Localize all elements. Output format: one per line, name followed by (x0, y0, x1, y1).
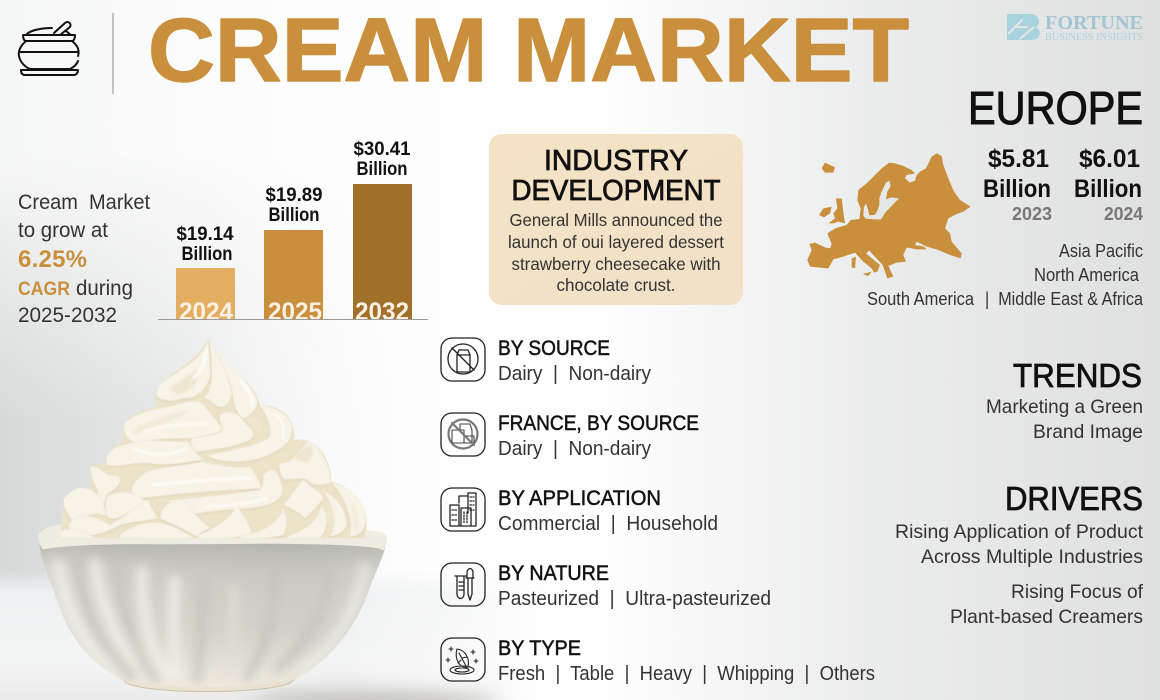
text: market growth (18, 191, 150, 327)
text: other regions: North America (1034, 265, 1140, 285)
panel: industry development: INDUSTRY (544, 145, 688, 177)
panel: industry development: chocolate crust. (556, 275, 676, 295)
logo: Fortune Business Insights: FORTUNE (1045, 12, 1143, 34)
bar chart: market size: Billion (356, 159, 408, 180)
bowl body (33, 538, 393, 697)
values: Europe market size: $6.01 (1079, 145, 1140, 173)
values: Europe market size: 2024 (1104, 204, 1143, 224)
heading: Europe: EUROPE (968, 82, 1143, 134)
segment: by nature: BY NATURE (498, 562, 609, 585)
text: trends: Marketing a Green (986, 396, 1143, 418)
panel: industry development: DEVELOPMENT (512, 175, 721, 207)
panel: industry development (489, 134, 743, 305)
bowl rim (38, 524, 387, 551)
text: drivers: Rising Application of Product (895, 521, 1144, 543)
values: Europe market size: Billion (1074, 175, 1142, 203)
segment: by application: Commercial | Household (498, 513, 718, 535)
bar chart: market size: $19.89 (266, 185, 322, 206)
text: other regions: South America (867, 289, 975, 309)
panel: industry development: strawberry cheesecake with (512, 254, 720, 274)
text: trends: Brand Image (1033, 421, 1143, 443)
text: other regions (867, 241, 1144, 309)
text: market growth: to grow at (18, 219, 108, 242)
segment: by source: BY SOURCE (498, 337, 610, 360)
title: CREAM MARKET (148, 1, 909, 101)
logo: Fortune Business Insights (1007, 12, 1143, 43)
text: drivers: Across Multiple Industries (921, 546, 1143, 568)
segment: by application (441, 487, 718, 535)
segment: by nature (441, 562, 771, 610)
photo: bowl of whipped cream (33, 335, 500, 700)
segment: by application: BY APPLICATION (498, 487, 661, 510)
bar chart: market size: $30.41 (354, 139, 411, 160)
segment: France, by source: Dairy | Non-dairy (498, 438, 651, 460)
text: drivers: DRIVERS (1005, 480, 1143, 517)
panel: industry development: launch of oui layered dessert (508, 232, 724, 252)
text: drivers: Rising Focus of (1011, 581, 1144, 603)
segment: by type: Fresh | Table | Heavy | Whipping | Others (498, 663, 875, 685)
text: drivers (895, 480, 1144, 628)
segment: by nature: Pasteurized | Ultra-pasteurized (498, 588, 771, 610)
bar chart: market size: Billion (182, 244, 232, 265)
bar chart: market size: 2025 (268, 298, 322, 326)
text: market growth: CAGR (18, 279, 70, 300)
bar chart: market size: 2032 (355, 298, 409, 326)
bar chart: market size: $19.14 (176, 224, 234, 245)
segment: France, by source (441, 412, 699, 460)
text: market growth: during (76, 277, 133, 300)
text: drivers: Plant-based Creamers (950, 606, 1143, 628)
values: Europe market size: Billion (983, 175, 1051, 203)
segment: France, by source: FRANCE, BY SOURCE (498, 412, 699, 435)
text: market growth: 6.25% (18, 246, 87, 273)
values: Europe market size: 2023 (1012, 204, 1052, 224)
bar chart: market size (158, 139, 428, 326)
bar chart: market size: Billion (268, 205, 320, 226)
text: market growth: 2025-2032 (18, 304, 117, 327)
segment: by type (441, 637, 875, 685)
cream swirl (57, 335, 370, 542)
bar chart: market size: 2024 (179, 298, 233, 326)
logo: Fortune Business Insights: BUSINESS INSIGHTS (1045, 32, 1143, 43)
segment: by type: BY TYPE (498, 637, 581, 660)
values: Europe market size: $5.81 (988, 145, 1049, 173)
icon: cream pot (19, 22, 79, 75)
text: trends: TRENDS (1013, 357, 1142, 394)
segment: by source: Dairy | Non-dairy (498, 363, 651, 385)
text: other regions: | Middle East & Africa (985, 289, 1144, 309)
text: market growth: Cream Market (18, 191, 150, 214)
segment: by source (441, 337, 651, 385)
text: other regions: Asia Pacific (1059, 241, 1143, 261)
text: trends (986, 357, 1143, 443)
values: Europe market size (983, 145, 1143, 224)
map: Europe (807, 153, 971, 278)
panel: industry development: General Mills announced the (510, 210, 722, 230)
